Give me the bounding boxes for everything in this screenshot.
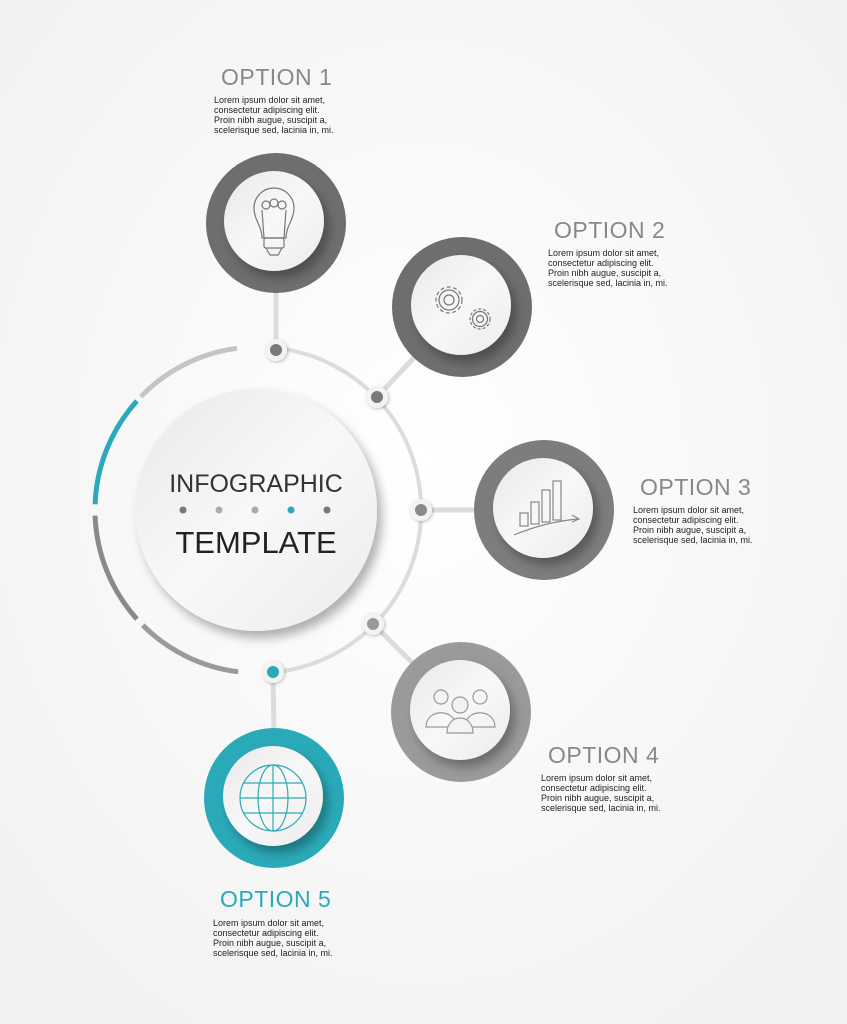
- option 5 text: consectetur adipiscing elit.: [213, 928, 319, 938]
- center circle: TEMPLATE: [175, 525, 337, 560]
- option 3 text: scelerisque sed, lacinia in, mi.: [633, 535, 753, 545]
- option 5 circle: globe: [204, 728, 344, 868]
- option 1 text: Lorem ipsum dolor sit amet,: [214, 95, 325, 105]
- option 5 text: Lorem ipsum dolor sit amet,: [213, 918, 324, 928]
- center circle: [135, 389, 377, 631]
- option 1 text: scelerisque sed, lacinia in, mi.: [214, 125, 334, 135]
- option 4 text: scelerisque sed, lacinia in, mi.: [541, 803, 661, 813]
- option 3 title: OPTION 3: [640, 474, 751, 500]
- option 5 title: OPTION 5: [220, 886, 331, 912]
- option 4 text: [541, 773, 661, 813]
- option 3 text: [633, 505, 753, 545]
- center circle: INFOGRAPHIC: [169, 470, 343, 498]
- option 5 text: scelerisque sed, lacinia in, mi.: [213, 948, 333, 958]
- option 4 text: Lorem ipsum dolor sit amet,: [541, 773, 652, 783]
- option 1 text: consectetur adipiscing elit.: [214, 105, 320, 115]
- option 3 text: Lorem ipsum dolor sit amet,: [633, 505, 744, 515]
- option 2 circle: gears: [392, 237, 532, 377]
- option 1 circle: bulb: [206, 153, 346, 293]
- option 1 text: [214, 95, 334, 135]
- option 4 title: OPTION 4: [548, 742, 659, 768]
- option 4 text: consectetur adipiscing elit.: [541, 783, 647, 793]
- ring: right arc: [278, 348, 421, 672]
- option 3 circle: chart: [474, 440, 614, 580]
- ring: left arcs: [95, 348, 238, 672]
- option 2 text: consectetur adipiscing elit.: [548, 258, 654, 268]
- option 5 text: [213, 918, 333, 958]
- option 1 title: OPTION 1: [221, 64, 332, 90]
- option 2 text: [548, 248, 668, 288]
- option 2 text: Proin nibh augue, suscipit a,: [548, 268, 661, 278]
- option 3 text: consectetur adipiscing elit.: [633, 515, 739, 525]
- option 2 text: Lorem ipsum dolor sit amet,: [548, 248, 659, 258]
- option 4 circle: people: [391, 642, 531, 782]
- option 3 text: Proin nibh augue, suscipit a,: [633, 525, 746, 535]
- connectors: [273, 290, 480, 735]
- option 2 text: scelerisque sed, lacinia in, mi.: [548, 278, 668, 288]
- nodes: [262, 339, 432, 683]
- option 4 text: Proin nibh augue, suscipit a,: [541, 793, 654, 803]
- option 5 text: Proin nibh augue, suscipit a,: [213, 938, 326, 948]
- option 2 title: OPTION 2: [554, 217, 665, 243]
- option 1 text: Proin nibh augue, suscipit a,: [214, 115, 327, 125]
